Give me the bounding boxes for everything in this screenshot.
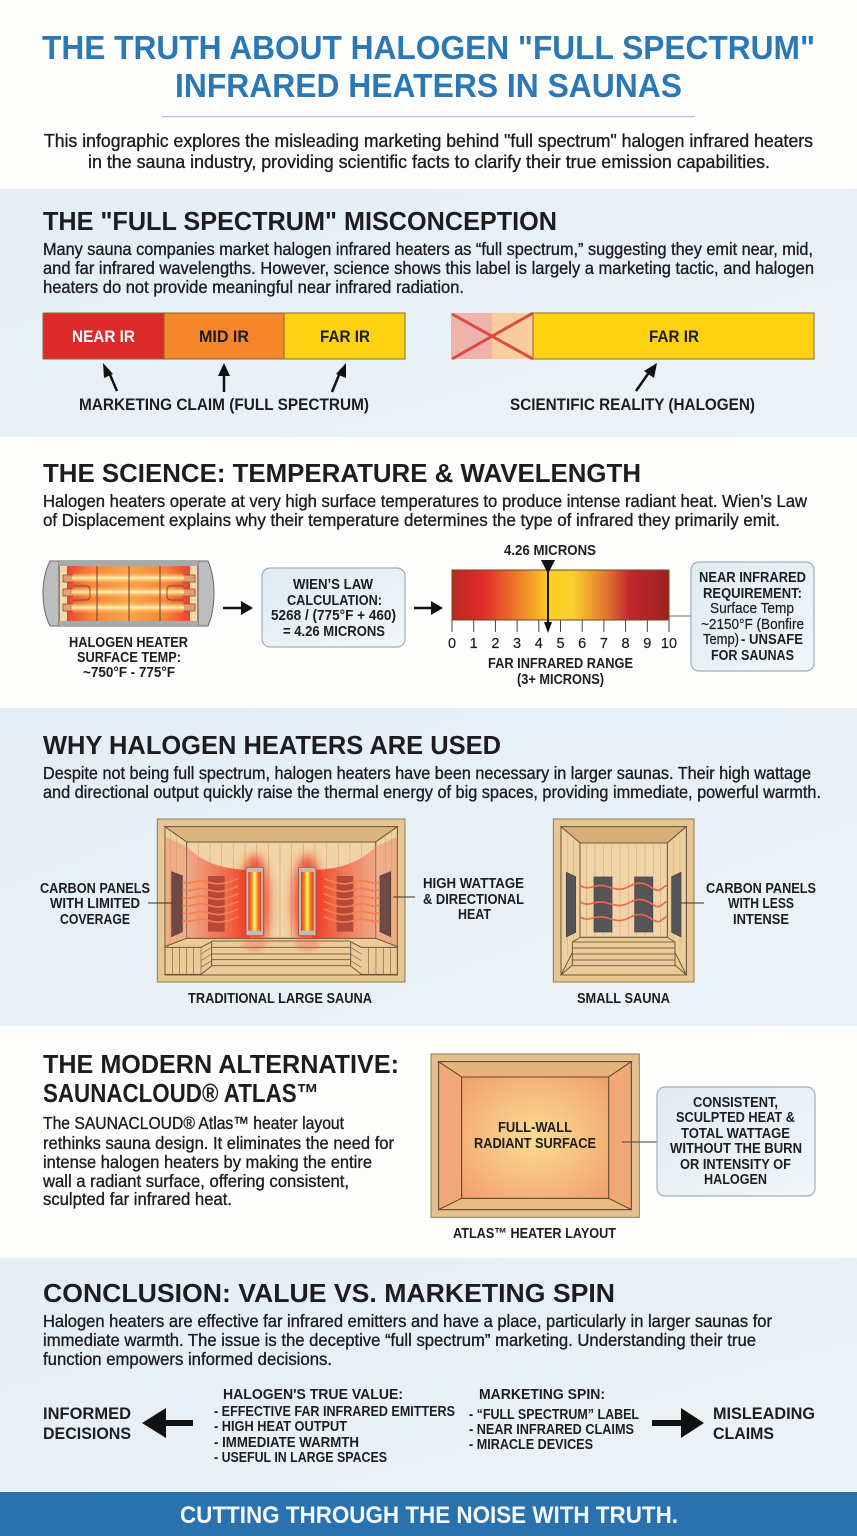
chart: wavelength scale: 10 — [661, 636, 677, 652]
list: halogen's true value: - HIGH HEAT OUTPUT — [214, 1419, 347, 1435]
callout: wien's law calculation: = 4.26 MICRONS — [283, 624, 385, 640]
chart: wavelength scale: 7 — [600, 636, 608, 652]
list: halogen's true value: - IMMEDIATE WARMTH — [214, 1435, 359, 1451]
arrow: near ir — [103, 363, 117, 391]
title — [42, 29, 815, 117]
text block: misconception: and far infrared wavelengths. However, science shows this label is largely a marketing tactic, and halogen — [43, 258, 814, 278]
text block: modern alternative: wall a radiant surface, offering consistent, — [42, 1171, 349, 1191]
panel: why halogen heaters are used — [0, 708, 857, 1026]
heading: modern alternative: THE MODERN ALTERNATIVE: — [43, 1049, 399, 1079]
footer banner — [0, 1492, 857, 1536]
arrow: calculation to scale — [414, 601, 443, 615]
label: far infrared range: FAR INFRARED RANGE — [488, 656, 633, 672]
illustration: small sauna — [553, 819, 694, 982]
panel: the full spectrum misconception — [0, 189, 857, 437]
chart: marketing claim spectrum bar: NEAR IR — [72, 327, 135, 346]
label: informed decisions — [43, 1404, 131, 1443]
intro text: in the sauna industry, providing scientific facts to clarify their true emission capabilities. — [88, 152, 770, 172]
list: halogen's true value: - EFFECTIVE FAR INFRARED EMITTERS — [214, 1404, 455, 1420]
label: full-wall radiant surface — [474, 1120, 596, 1152]
callout: near infrared requirement: ~2150°F (Bonfire — [701, 617, 804, 633]
arrow: far ir — [332, 363, 346, 392]
callout: consistent sculpted heat: HALOGEN — [704, 1172, 767, 1188]
text block: modern alternative: intense halogen heaters by making the entire — [43, 1152, 372, 1172]
illustration: traditional large sauna — [157, 819, 405, 982]
heading: modern alternative — [43, 1049, 399, 1108]
callout: near infrared requirement: Surface Temp — [710, 601, 794, 617]
label: marketing claim: MARKETING CLAIM (FULL SPECTRUM) — [79, 395, 369, 414]
text block: conclusion: function empowers informed decisions. — [43, 1349, 332, 1369]
label: informed decisions: INFORMED — [43, 1404, 131, 1423]
panel: conclusion — [0, 1258, 857, 1492]
label: carbon panels with limited coverage: WITH LIMITED — [50, 896, 140, 912]
chart: wavelength scale: 1 — [470, 636, 478, 652]
text block: why halogen: and directional output quickly raise the thermal energy of big spaces, providing immediate, powerful warmth. — [43, 782, 821, 802]
label: full-wall radiant surface: FULL-WALL — [498, 1120, 572, 1136]
callout: near infrared requirement: FOR SAUNAS — [711, 648, 794, 664]
label: full-wall radiant surface: RADIANT SURFACE — [474, 1136, 596, 1152]
label: carbon panels with less intense: CARBON PANELS — [706, 881, 816, 897]
chart: wavelength scale: 6 — [578, 636, 586, 652]
list: halogen's true value: - USEFUL IN LARGE SPACES — [214, 1450, 387, 1466]
list: halogen's true value: HALOGEN'S TRUE VALUE: — [223, 1387, 403, 1403]
text block: misconception: heaters do not provide meaningful near infrared radiation. — [43, 277, 464, 297]
callout: wien's law calculation: CALCULATION: — [287, 593, 382, 609]
label: high wattage and directional heat: & DIRECTIONAL — [423, 892, 524, 908]
heading: science: THE SCIENCE: TEMPERATURE & WAVELENGTH — [43, 458, 641, 488]
heading: modern alternative: SAUNACLOUD® ATLAS™ — [43, 1078, 319, 1108]
callout: wien's law calculation — [262, 568, 405, 647]
text block: modern alternative: rethinks sauna design. It eliminates the need for — [43, 1133, 394, 1153]
text block: conclusion: immediate warmth. The issue is the deceptive “full spectrum” marketing. Understanding their true — [43, 1330, 756, 1350]
text block: why halogen — [43, 763, 821, 802]
list: marketing spin: - “FULL SPECTRUM” LABEL — [469, 1407, 639, 1423]
text block: modern alternative — [42, 1113, 394, 1209]
text block: conclusion — [43, 1311, 772, 1369]
callout: consistent sculpted heat: SCULPTED HEAT & — [676, 1110, 795, 1126]
title: INFRARED HEATERS IN SAUNAS — [175, 67, 682, 104]
label: high wattage and directional heat: HEAT — [458, 907, 491, 923]
text block: misconception: Many sauna companies market halogen infrared heaters as “full spectrum,” suggesting they emit near, mid, — [43, 239, 813, 259]
callout: consistent sculpted heat: OR INTENSITY OF — [680, 1157, 791, 1173]
list: marketing spin — [469, 1387, 639, 1453]
callout: near infrared requirement: REQUIREMENT: — [703, 586, 802, 602]
label: halogen heater: HALOGEN HEATER — [69, 635, 188, 651]
arrow: heater to calculation — [223, 601, 253, 615]
chart: wavelength scale: 5 — [556, 636, 565, 652]
callout: wien's law calculation: WIEN’S LAW — [293, 577, 373, 593]
chart: marketing claim spectrum bar: MID IR — [199, 327, 249, 346]
chart: wavelength scale: 8 — [622, 636, 630, 652]
callout: consistent sculpted heat: CONSISTENT, — [693, 1095, 778, 1111]
callout: wien's law calculation: 5268 / (775°F + 460) — [271, 608, 396, 624]
list: halogen's true value — [214, 1387, 455, 1466]
text block: modern alternative: The SAUNACLOUD® Atlas™ heater layout — [43, 1113, 344, 1133]
label: informed decisions: DECISIONS — [43, 1424, 131, 1443]
callout: consistent sculpted heat — [622, 1087, 815, 1196]
title: THE TRUTH ABOUT HALOGEN "FULL SPECTRUM" — [42, 29, 815, 66]
label: scientific reality: SCIENTIFIC REALITY (HALOGEN) — [510, 395, 755, 414]
arrow: to misleading claims — [652, 1408, 704, 1438]
callout: near infrared requirement: Temp) — [703, 632, 739, 648]
heading: conclusion: CONCLUSION: VALUE VS. MARKETING SPIN — [43, 1278, 615, 1308]
text block: conclusion: Halogen heaters are effective far infrared emitters and have a place, particularly in larger saunas for — [43, 1311, 772, 1331]
label: carbon panels with less intense: WITH LESS — [728, 896, 794, 912]
text block: misconception — [43, 239, 814, 297]
label: far infrared range — [488, 656, 633, 688]
text block: science: Halogen heaters operate at very high surface temperatures to produce intense radiant heat. Wien’s Law — [43, 491, 807, 511]
chart: wavelength scale: 2 — [491, 636, 499, 652]
callout: near infrared requirement — [669, 562, 814, 671]
callout: near infrared requirement: NEAR INFRARED — [699, 570, 806, 586]
arrow: mid ir — [218, 363, 230, 392]
text block: why halogen: Despite not being full spectrum, halogen heaters have been necessary in larger saunas. Their high wattage — [43, 763, 811, 783]
chart: marketing claim spectrum bar: FAR IR — [320, 327, 370, 346]
intro text: This infographic explores the misleading marketing behind "full spectrum" halogen infrared heaters — [44, 131, 813, 151]
illustration: atlas heater layout — [431, 1054, 639, 1217]
chart: wavelength scale: 3 — [513, 636, 521, 652]
chart: scientific reality spectrum bar — [451, 313, 814, 359]
heading: why halogen: WHY HALOGEN HEATERS ARE USED — [43, 730, 501, 760]
callout: near infrared requirement: - UNSAFE — [741, 632, 803, 648]
chart: wavelength scale: 0 — [448, 636, 456, 652]
label: carbon panels with less intense: INTENSE — [733, 912, 789, 928]
label: carbon panels with limited coverage: CARBON PANELS — [40, 881, 150, 897]
text block: science: of Displacement explains why their temperature determines the type of infrared they primarily emit. — [43, 510, 780, 530]
chart: scientific reality spectrum bar: FAR IR — [649, 327, 699, 346]
marker: 4.26 position — [541, 560, 555, 633]
label: high wattage and directional heat — [393, 876, 524, 923]
chart: wavelength scale: 9 — [643, 636, 651, 652]
heading: misconception: THE "FULL SPECTRUM" MISCONCEPTION — [43, 206, 557, 236]
label: small sauna: SMALL SAUNA — [577, 991, 670, 1007]
chart: wavelength scale — [448, 543, 677, 652]
label: carbon panels with limited coverage: COVERAGE — [60, 912, 130, 928]
label: far infrared range: (3+ MICRONS) — [517, 672, 604, 688]
chart: marketing claim spectrum bar — [43, 313, 405, 359]
label: misleading claims: MISLEADING — [713, 1404, 815, 1423]
label: 4.26 microns: 4.26 MICRONS — [504, 543, 596, 559]
label: high wattage and directional heat: HIGH WATTAGE — [423, 876, 524, 892]
arrow: to informed decisions — [142, 1408, 193, 1438]
arrow: far ir reality — [636, 363, 657, 391]
callout: consistent sculpted heat: TOTAL WATTAGE — [681, 1126, 790, 1142]
label: misleading claims: CLAIMS — [713, 1424, 774, 1443]
footer banner: CUTTING THROUGH THE NOISE WITH TRUTH. — [180, 1502, 678, 1529]
label: carbon panels with less intense — [681, 881, 816, 928]
label: halogen heater: ~750°F - 775°F — [83, 665, 175, 681]
list: marketing spin: MARKETING SPIN: — [479, 1387, 605, 1403]
text block: science — [43, 491, 807, 530]
panel: the science — [43, 458, 814, 688]
label: halogen heater — [69, 635, 188, 681]
list: marketing spin: - MIRACLE DEVICES — [469, 1437, 593, 1453]
chart: wavelength scale: 4 — [535, 636, 543, 652]
text block: modern alternative: sculpted far infrared heat. — [43, 1189, 232, 1209]
label: misleading claims — [713, 1404, 815, 1443]
label: atlas heater layout: ATLAS™ HEATER LAYOUT — [453, 1226, 616, 1242]
intro text — [44, 131, 813, 172]
label: carbon panels with limited coverage — [40, 881, 172, 928]
label: traditional large sauna: TRADITIONAL LARGE SAUNA — [188, 991, 372, 1007]
label: halogen heater: SURFACE TEMP: — [77, 650, 181, 666]
callout: consistent sculpted heat: WITHOUT THE BURN — [670, 1141, 802, 1157]
list: marketing spin: - NEAR INFRARED CLAIMS — [469, 1422, 634, 1438]
icon: halogen heater — [43, 561, 214, 626]
panel: the modern alternative — [42, 1049, 815, 1242]
